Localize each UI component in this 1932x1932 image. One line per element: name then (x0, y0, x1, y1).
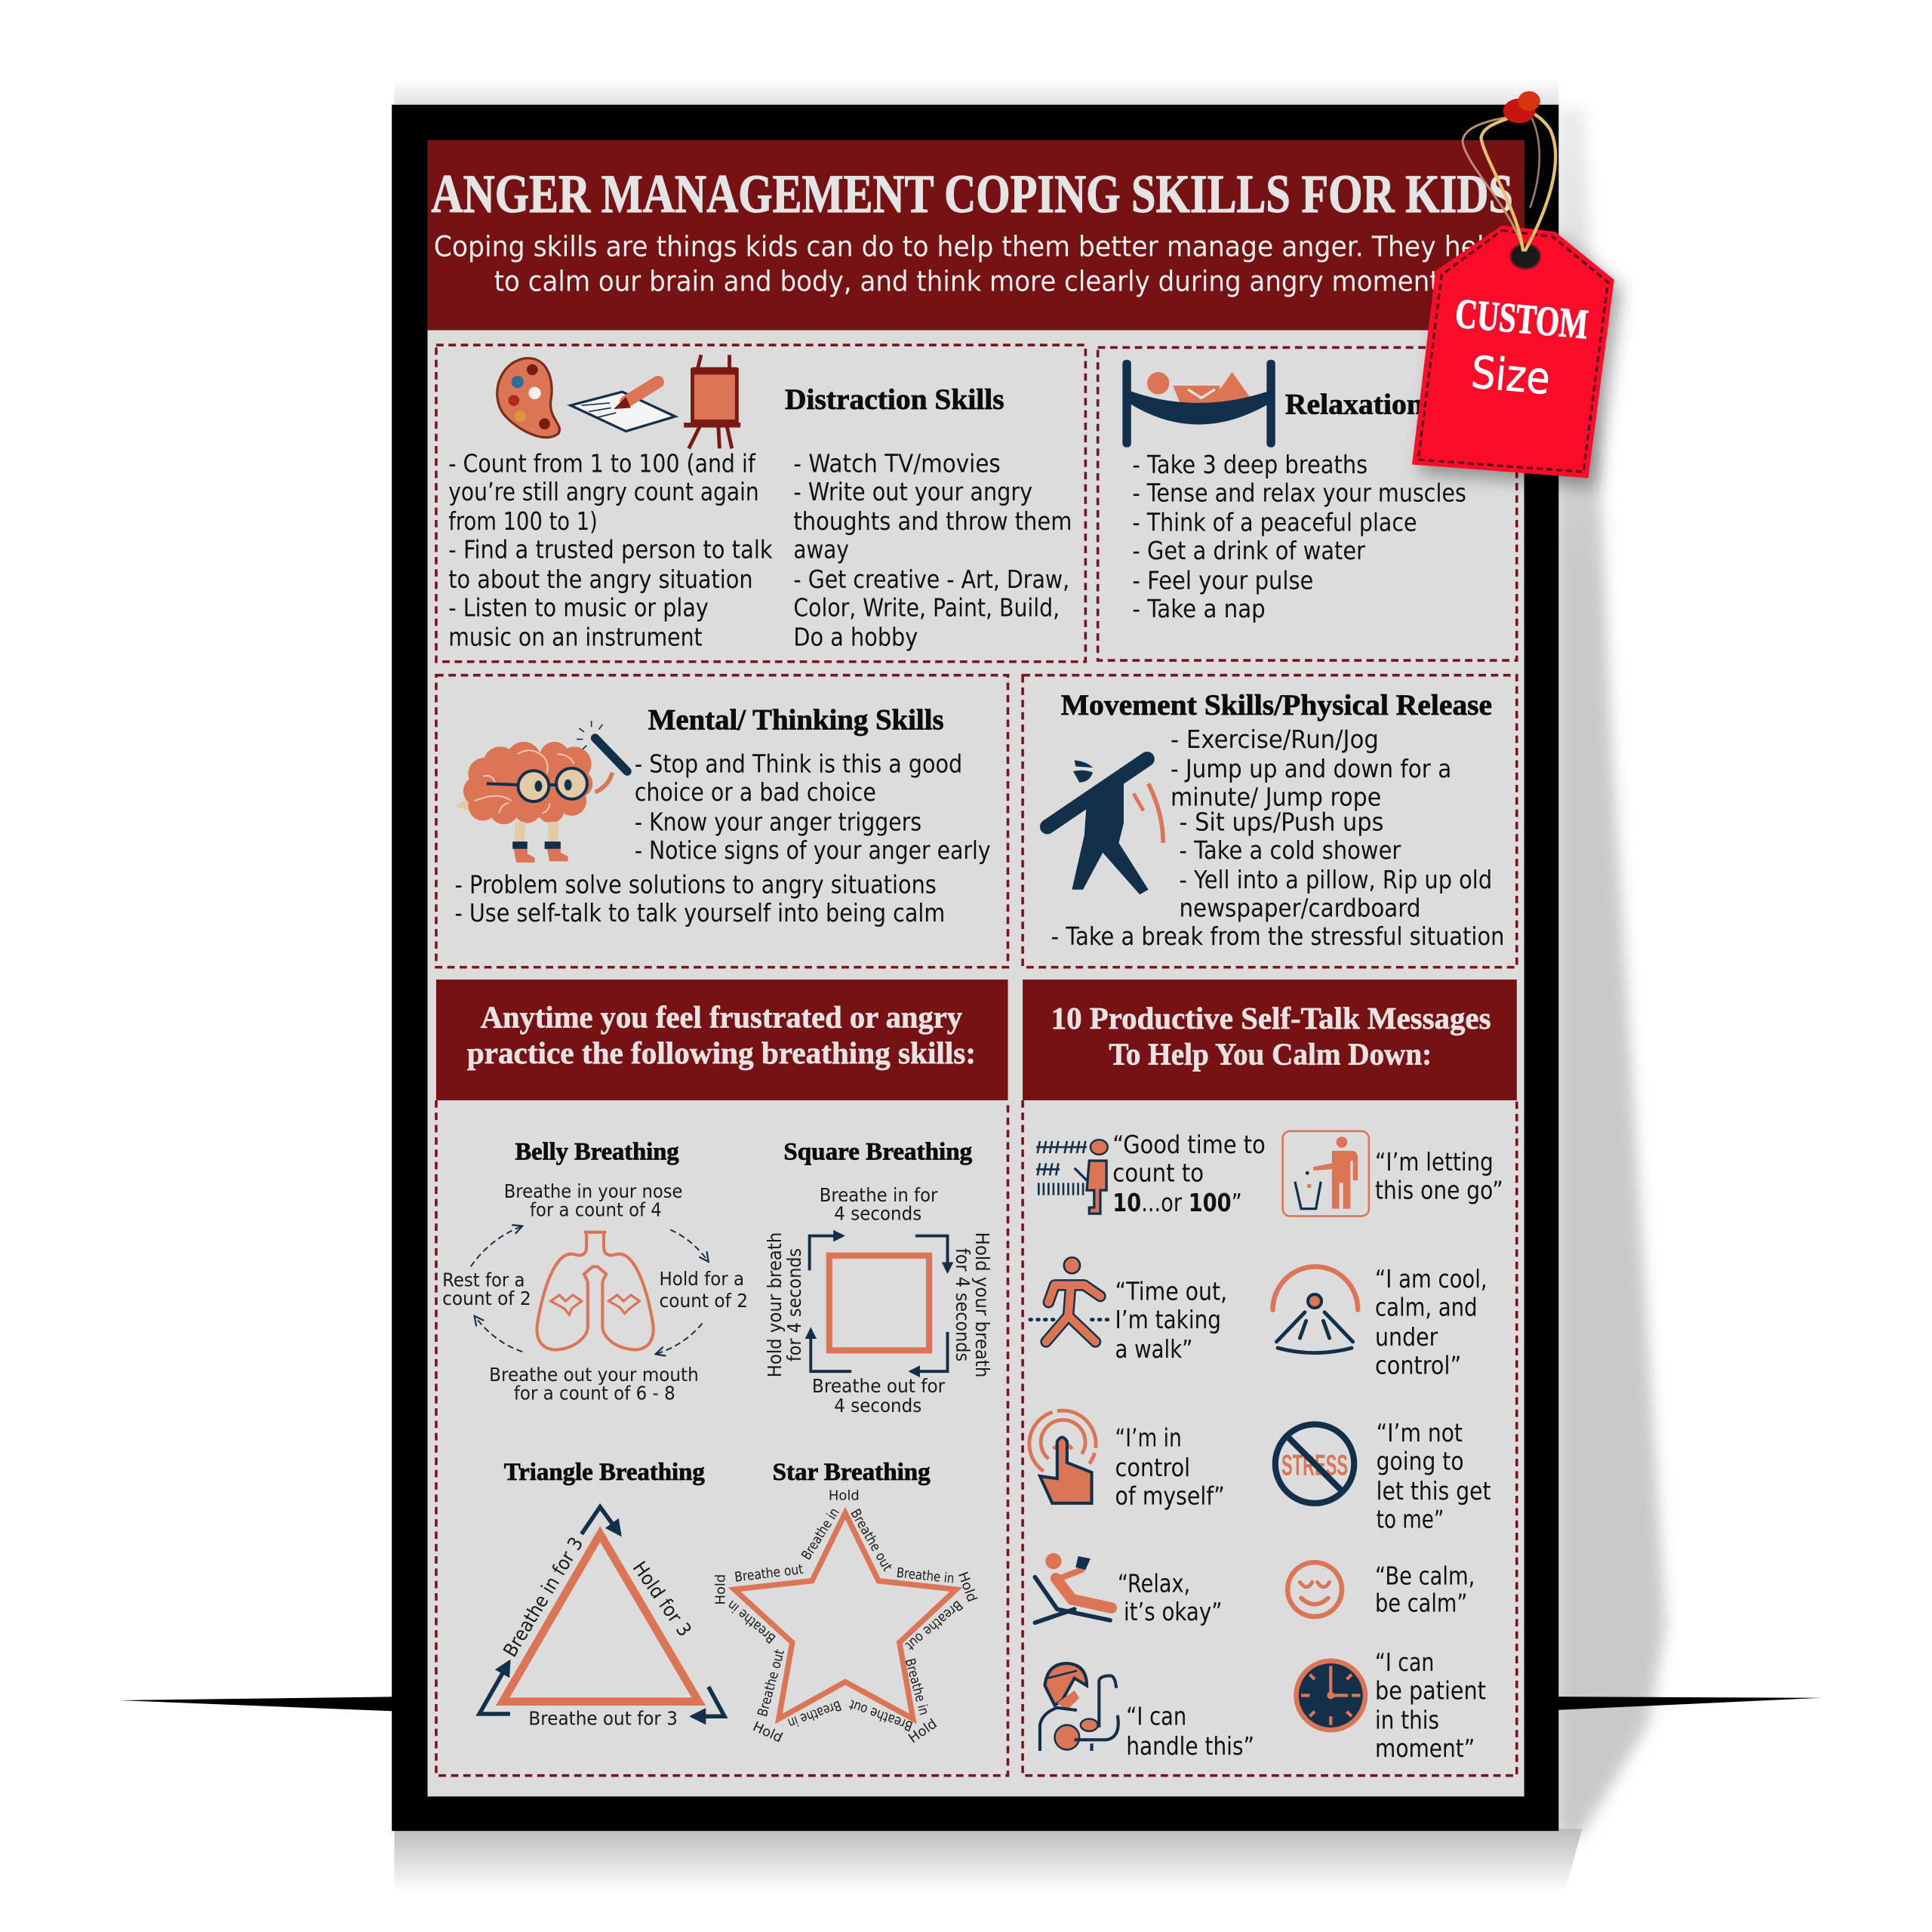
belly labels: Breathe in your nose (504, 1180, 682, 1202)
square breathing (764, 1138, 993, 1417)
skills list: - Take a break from the stressful situation (1051, 922, 1504, 951)
message: relax it's okay: it’s okay” (1124, 1598, 1223, 1626)
hanging spike left (119, 1697, 401, 1712)
message: good time to count: “Good time to (1112, 1131, 1266, 1159)
banner: breathing skills: Anytime you feel frustrated or angry (481, 1001, 962, 1035)
message: not going to let this get to me: let this get (1377, 1477, 1491, 1506)
left skills list: - Listen to music or play (448, 593, 709, 622)
star labels: Breathe in (798, 1506, 843, 1563)
square labels: 4 seconds (834, 1395, 921, 1417)
tag stitching (1418, 230, 1608, 472)
message: taking a walk (1030, 1257, 1227, 1364)
skills list: minute/ Jump rope (1171, 783, 1381, 812)
skills list: - Use self-talk to talk yourself into being calm (454, 899, 945, 928)
message: can handle this: “I can (1126, 1703, 1186, 1731)
right skills list: - Write out your angry (793, 478, 1032, 506)
icon: boxer (1040, 1663, 1118, 1751)
message: in control: of myself” (1115, 1481, 1225, 1510)
star labels: Breathe in (902, 1657, 932, 1717)
right skills list: - Get creative - Art, Draw, (793, 565, 1069, 594)
title: ANGER MANAGEMENT COPING SKILLS FOR KIDS (431, 164, 1513, 224)
message: not going to let this get to me (1275, 1419, 1491, 1534)
belly labels: for a count of 4 (530, 1198, 662, 1220)
message: be calm: “Be calm, (1375, 1562, 1475, 1591)
icon: reclining person (1035, 1553, 1112, 1623)
message: patient: “I can (1375, 1648, 1434, 1677)
right skills list: away (793, 536, 849, 565)
message: be calm: be calm” (1375, 1589, 1467, 1618)
message: patient: moment” (1375, 1734, 1475, 1763)
left skills list: music on an instrument (448, 623, 703, 652)
right skills list: thoughts and throw them (793, 507, 1072, 536)
star labels: Breathe in (786, 1697, 843, 1730)
belly labels (442, 1180, 748, 1404)
left skills list: - Find a trusted person to talk (448, 536, 773, 565)
skills list: - Think of a peaceful place (1132, 509, 1417, 537)
star labels (713, 1488, 980, 1746)
icon: clock (1297, 1661, 1365, 1730)
icon: lungs (537, 1232, 654, 1349)
message: in control: control (1115, 1454, 1190, 1482)
skills list: - Get a drink of water (1132, 537, 1365, 565)
message: good time to count (1036, 1131, 1266, 1217)
star breathing (713, 1459, 980, 1746)
message: good time to count: 10...or 100” (1112, 1189, 1242, 1217)
left skills list (448, 449, 773, 652)
square labels (764, 1184, 993, 1417)
square breathing: Square Breathing (783, 1138, 972, 1165)
left skills list: from 100 to 1) (448, 507, 598, 536)
panel: self-talk messages (1023, 1100, 1517, 1776)
star labels: Hold (906, 1716, 940, 1746)
icon: hammock (1122, 360, 1275, 448)
skills list: - Tense and relax your muscles (1132, 478, 1466, 507)
star labels: Breathe in (896, 1565, 955, 1587)
star labels: Breathe out (734, 1561, 804, 1586)
message: can handle this (1040, 1663, 1254, 1761)
star labels: Breathe out (847, 1506, 895, 1574)
belly breathing: Belly Breathing (515, 1138, 679, 1165)
banner: self-talk messages: To Help You Calm Down: (1109, 1038, 1432, 1072)
square labels: Hold your breath (764, 1232, 786, 1377)
skills list: - Know your anger triggers (635, 808, 921, 836)
heading: Mental/ Thinking Skills (648, 704, 944, 737)
black frame (392, 105, 1558, 1831)
skills list: - Yell into a pillow, Rip up old (1179, 866, 1492, 894)
icon: easel (684, 355, 740, 448)
skills list (1051, 725, 1504, 951)
right skills list: Do a hobby (793, 623, 918, 652)
message: taking a walk: I’m taking (1115, 1306, 1221, 1334)
message: can handle this: handle this” (1126, 1732, 1254, 1761)
message: letting this one go (1283, 1131, 1503, 1216)
icon: smiley (1287, 1562, 1342, 1617)
message: taking a walk: “Time out, (1115, 1277, 1227, 1306)
message: cool and calm (1273, 1265, 1487, 1380)
icon: touch hand (1029, 1411, 1096, 1503)
star labels: Hold (955, 1570, 980, 1604)
message: patient: be patient (1375, 1676, 1486, 1705)
message: patient (1297, 1648, 1486, 1763)
skills list: - Take a cold shower (1179, 836, 1401, 865)
icon: no stress: STRESS (1281, 1449, 1348, 1481)
banner: self-talk messages (1023, 980, 1517, 1100)
skills list: - Notice signs of your anger early (635, 836, 991, 865)
star labels: Breathe in (724, 1597, 779, 1646)
message: good time to count: count to (1112, 1159, 1204, 1188)
panel: breathing exercises (436, 1100, 1008, 1776)
right skills list (793, 449, 1072, 652)
belly labels: count of 2 (659, 1290, 748, 1312)
square labels: Breathe out for (812, 1375, 946, 1397)
skills list: - Feel your pulse (1132, 566, 1313, 595)
intro text (434, 230, 1501, 297)
left skills list: - Count from 1 to 100 (and if (448, 449, 756, 478)
message: in control (1029, 1411, 1225, 1510)
header banner (428, 140, 1524, 331)
heading: Movement Skills/Physical Release (1061, 689, 1492, 721)
skills list: - Jump up and down for a (1171, 755, 1451, 783)
tag body (1412, 226, 1614, 478)
star diagram (734, 1513, 956, 1719)
message: patient: in this (1375, 1706, 1439, 1735)
skills list: - Take 3 deep breaths (1132, 451, 1367, 479)
skills list: newspaper/cardboard (1179, 894, 1420, 923)
star labels: Breathe out (755, 1647, 788, 1718)
skills list (454, 750, 991, 928)
banner: breathing skills: practice the following breathing skills: (467, 1036, 976, 1070)
icon: tally and person (1036, 1140, 1108, 1214)
icon: stretching figure (1048, 759, 1163, 894)
message: relax it's okay (1035, 1553, 1223, 1626)
triangle breathing (479, 1459, 724, 1730)
skills list: choice or a bad choice (635, 778, 876, 807)
poster drop shadow (394, 78, 1666, 1893)
icon: walking person (1030, 1257, 1110, 1342)
square labels: for 4 seconds (783, 1248, 805, 1361)
message: cool and calm: calm, and (1375, 1294, 1478, 1322)
banner: self-talk messages: 10 Productive Self-Talk Messages (1051, 1001, 1491, 1035)
belly labels: count of 2 (442, 1287, 531, 1309)
skills list: - Sit ups/Push ups (1179, 808, 1383, 836)
panel: mental thinking skills (436, 675, 1008, 968)
skills list: - Stop and Think is this a good (635, 750, 962, 779)
right skills list: - Watch TV/movies (793, 449, 1001, 478)
belly labels: Breathe out your mouth (489, 1364, 699, 1386)
skills list: - Take a nap (1132, 595, 1266, 623)
square diagram (810, 1236, 948, 1371)
square labels: Hold your breath (971, 1232, 993, 1377)
triangle labels (499, 1534, 696, 1730)
skills list: - Exercise/Run/Jog (1171, 725, 1379, 754)
icon: brain with glasses (460, 721, 627, 863)
right skills list: Color, Write, Paint, Build, (793, 593, 1060, 622)
heading: Distraction Skills (785, 383, 1004, 416)
intro text: Coping skills are things kids can do to help them better manage anger. They help (434, 230, 1501, 263)
triangle labels: Breathe out for 3 (528, 1708, 678, 1730)
skills list: - Problem solve solutions to angry situations (454, 871, 937, 900)
message: be calm (1287, 1562, 1475, 1618)
poster sheet (428, 140, 1524, 1796)
message: letting this one go: this one go” (1375, 1177, 1503, 1205)
tag text: custom: CUSTOM (1454, 291, 1590, 348)
panel: movement skills (1023, 675, 1517, 968)
belly breathing (442, 1138, 748, 1404)
icon: paint palette (497, 358, 559, 438)
message: relax it's okay: “Relax, (1118, 1569, 1190, 1598)
icon: meditating person (1273, 1266, 1358, 1353)
star labels: Hold (829, 1488, 860, 1504)
triangle breathing: Triangle Breathing (504, 1459, 705, 1486)
belly labels: for a count of 6 - 8 (514, 1383, 675, 1404)
custom size hang tag (1412, 226, 1614, 478)
heading: Relaxation Skills (1285, 389, 1501, 421)
panel: relaxation skills (1098, 347, 1517, 660)
panel: distraction skills (436, 345, 1085, 662)
tag text: size: Size (1469, 346, 1552, 405)
hanging spike right (1552, 1697, 1821, 1710)
message: not going to let this get to me: going to (1377, 1447, 1464, 1476)
message: cool and calm: “I am cool, (1375, 1265, 1487, 1294)
message: in control: “I’m in (1115, 1424, 1182, 1453)
tag hole (1511, 244, 1540, 269)
belly labels: Hold for a (659, 1268, 744, 1290)
message: letting this one go: “I’m letting (1375, 1148, 1494, 1177)
triangle labels: Hold for 3 (629, 1558, 696, 1641)
star labels: Hold (750, 1718, 785, 1746)
star breathing: Star Breathing (773, 1459, 931, 1486)
belly labels: Rest for a (442, 1269, 525, 1291)
star labels: Hold (713, 1574, 729, 1605)
message: taking a walk: a walk” (1115, 1335, 1192, 1364)
banner: breathing skills (436, 980, 1008, 1100)
message: cool and calm: control” (1375, 1351, 1461, 1380)
left skills list: to about the angry situation (448, 565, 753, 594)
triangle diagram (479, 1507, 724, 1716)
message: not going to let this get to me: “I’m not (1377, 1419, 1463, 1447)
triangle labels: Breathe in for 3 (499, 1534, 587, 1661)
message: cool and calm: under (1375, 1323, 1438, 1352)
icon: no stress (1275, 1424, 1354, 1503)
square labels: for 4 seconds (952, 1248, 974, 1361)
icon: paper and pencil (571, 382, 675, 431)
left skills list: you’re still angry count again (448, 478, 759, 506)
breathing arrows (471, 1226, 709, 1354)
square labels: 4 seconds (834, 1202, 921, 1224)
star labels: Breathe out (903, 1597, 965, 1654)
tag string (1463, 111, 1555, 250)
skills list (1132, 451, 1466, 623)
square labels: Breathe in for (820, 1184, 938, 1206)
icon: trash (1283, 1131, 1369, 1216)
push pin (1503, 91, 1540, 123)
star labels: Breathe out (847, 1697, 915, 1734)
intro text: to calm our brain and body, and think more clearly during angry moments. (494, 264, 1461, 297)
message: not going to let this get to me: to me” (1377, 1505, 1444, 1534)
